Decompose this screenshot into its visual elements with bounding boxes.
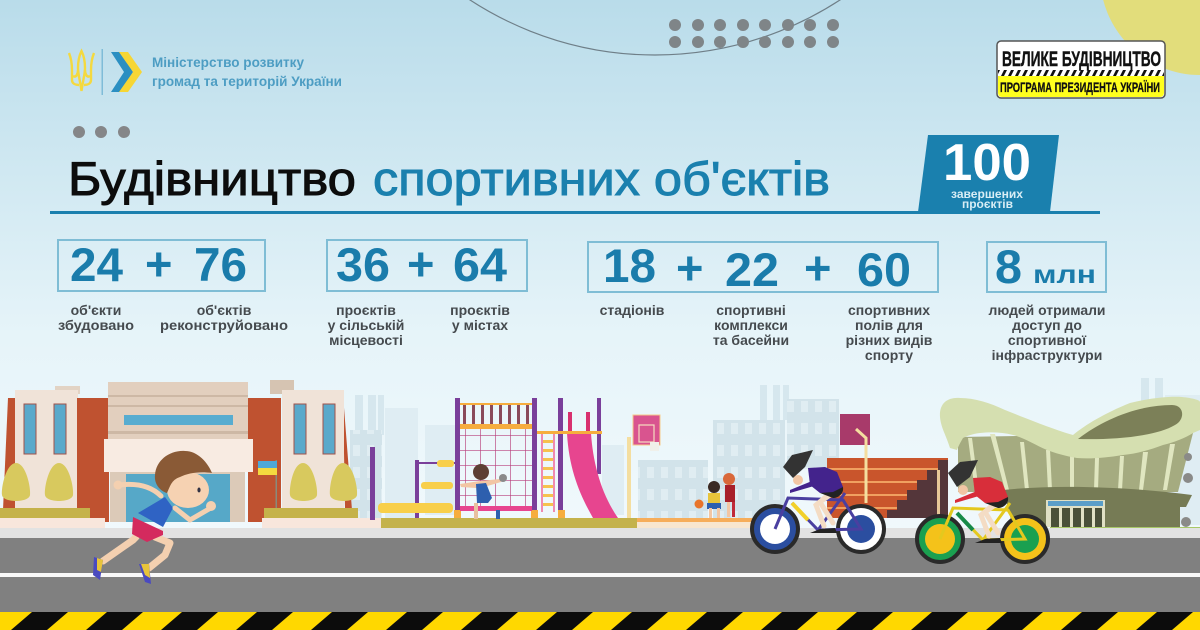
road marking (0, 573, 1200, 577)
stat: 8 million people: 8 (995, 240, 1022, 293)
total projects panel: завершених (951, 187, 1023, 201)
stat: 8 million people (987, 240, 1106, 363)
hedges (0, 508, 358, 518)
playground (370, 398, 637, 528)
stat: facility types: + (676, 241, 703, 294)
title: Будівництво (68, 152, 356, 205)
stat: facility types: спортивних (848, 302, 930, 318)
curb (0, 528, 1200, 538)
basketball court (627, 415, 762, 528)
title: спортивних об'єктів (373, 152, 830, 205)
title rule (50, 211, 1100, 214)
stat: facility types: комплекси (714, 317, 788, 333)
programme badge (997, 41, 1165, 98)
ladder (541, 434, 555, 512)
slide (567, 412, 618, 518)
total projects panel (918, 134, 1059, 212)
title (68, 152, 830, 205)
stat: rural and urban: місцевості (329, 332, 403, 348)
school building (0, 380, 382, 528)
frame behind slide (597, 398, 601, 474)
stat: 8 million people: інфраструктури (992, 347, 1102, 363)
icon: chevron (111, 52, 142, 92)
stat: built and reconstructed: реконструйовано (160, 317, 288, 333)
stadium (940, 397, 1200, 531)
stat: rural and urban: 64 (453, 238, 507, 291)
stat: 8 million people: доступ до (1012, 317, 1082, 333)
stat: 8 million people: людей отримали (988, 302, 1106, 318)
stat: rural and urban: + (407, 237, 434, 290)
stat: facility types: різних видів (846, 332, 933, 348)
stat: built and reconstructed: + (145, 237, 172, 290)
stat: rural and urban: проєктів (336, 302, 396, 318)
stat: facility types: та басейни (713, 332, 789, 348)
trees (2, 463, 357, 501)
stat: facility types: полів для (855, 317, 923, 333)
road (0, 538, 1200, 612)
icon: Ukrainian flag (258, 460, 277, 526)
stat: facility types: спорту (865, 347, 913, 363)
ministry name: Міністерство розвитку (152, 55, 304, 70)
stat: built and reconstructed (58, 237, 288, 333)
bleachers (827, 414, 948, 518)
frame (370, 398, 563, 520)
stat: rural and urban: проєктів (450, 302, 510, 318)
child on net (460, 464, 507, 519)
stat: rural and urban (327, 237, 527, 348)
stat: facility types: стадіонів (600, 302, 665, 318)
background skyline (350, 378, 1200, 525)
total projects panel: 100 (943, 134, 1031, 192)
runner (93, 451, 216, 584)
net (460, 429, 532, 506)
stat: rural and urban: у містах (452, 317, 508, 333)
stat: rural and urban: у сільській (328, 317, 404, 333)
padded bars (378, 460, 454, 513)
stat: facility types: спортивні (716, 302, 786, 318)
pavement (0, 518, 382, 528)
total projects panel: проєктів (962, 197, 1013, 211)
children with ball (694, 473, 735, 518)
decorative yellow circle (1100, 0, 1200, 75)
stat: facility types: 60 (857, 243, 911, 296)
stat: rural and urban: 36 (336, 238, 390, 291)
stat: facility types: 22 (725, 243, 779, 296)
hazard stripe (0, 612, 1200, 630)
cyclist: green bike (917, 460, 1048, 562)
title dots (73, 126, 130, 138)
stat: 8 million people: млн (1033, 261, 1096, 289)
cyclist: blue bike (752, 450, 884, 552)
stat: facility types (588, 239, 938, 363)
ministry name (152, 55, 342, 89)
stat: 8 million people: спортивної (1008, 332, 1087, 348)
stat: built and reconstructed: збудовано (58, 317, 134, 333)
stat: built and reconstructed: 24 (70, 238, 123, 291)
decorative arc (317, 0, 993, 55)
stat: built and reconstructed: 76 (194, 238, 247, 291)
icon: trident (69, 51, 94, 91)
stat: built and reconstructed: об'єкти (71, 302, 121, 318)
stat: facility types: 18 (603, 239, 656, 292)
stat: facility types: + (804, 241, 831, 294)
stat: built and reconstructed: об'єктів (197, 302, 252, 318)
decorative dot grid (669, 19, 839, 48)
grass (381, 518, 637, 528)
ministry logo (69, 49, 342, 95)
ministry name: громад та територій України (152, 74, 342, 89)
